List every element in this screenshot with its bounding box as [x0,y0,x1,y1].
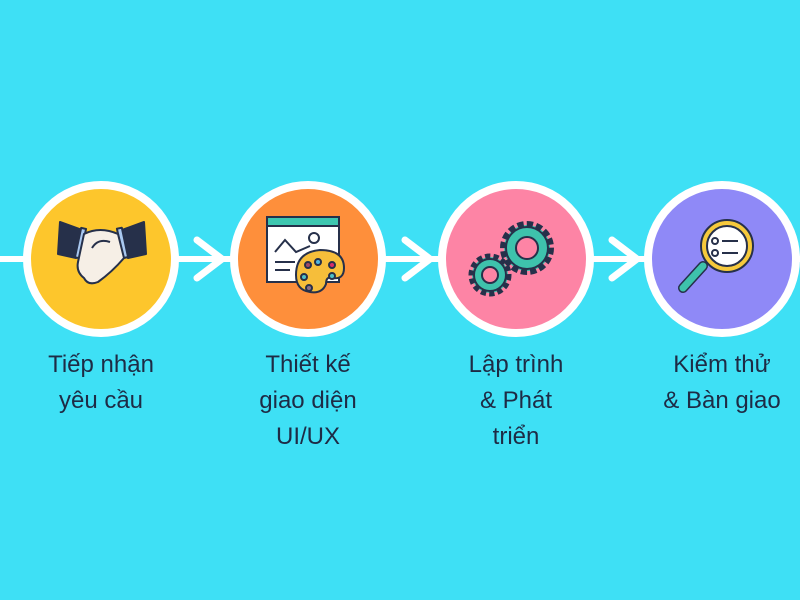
label 3: Lập trình [469,351,563,378]
arrow 1 [197,240,222,278]
label 4 [663,351,781,414]
label 2: UI/UX [276,423,340,450]
label 3: triển [493,423,539,450]
label 1: Tiếp nhận [48,351,154,378]
icon: handshake [58,222,146,283]
label 3 [469,351,563,450]
label 2: Thiết kế [265,351,351,378]
icon: magnifier with checklist [683,220,753,288]
label 2: giao diện [259,387,357,414]
label 4: & Bàn giao [663,387,781,414]
circle 4: testing [648,185,796,333]
label 1 [48,351,154,414]
icon: browser window with palette [267,217,344,292]
label 1: yêu cầu [59,387,143,414]
circle 1: handshake [27,185,175,333]
label 3: & Phát [480,387,552,414]
circle 2: UI design [234,185,382,333]
label 4: Kiểm thử [673,351,771,378]
label 2 [259,351,357,450]
connector line [0,256,800,262]
arrow 2 [405,240,430,278]
arrow 3 [612,240,637,278]
icon: gears [472,225,550,293]
circle 3: gears [442,185,590,333]
